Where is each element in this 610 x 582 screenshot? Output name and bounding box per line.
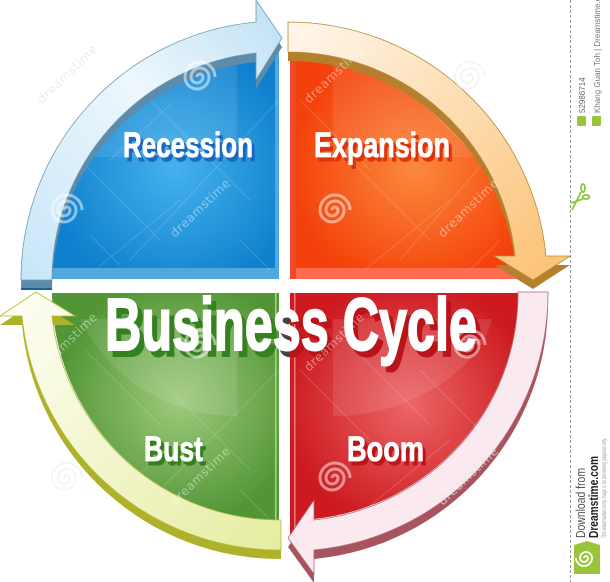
label: Expansion: Expansion (314, 126, 450, 165)
label: Boom: Boom (347, 430, 424, 469)
side credits: 52986714 (578, 77, 587, 113)
label: Expansion: Expansion (317, 130, 453, 169)
panel: bust (52, 293, 279, 520)
watermarks: dreamstime (435, 176, 501, 240)
watermarks: dreamstime (34, 310, 100, 374)
watermarks: dreamstime (167, 444, 233, 508)
label: Boom: Boom (350, 434, 427, 473)
watermarks: dreamstime (435, 444, 501, 508)
watermarks: dreamstime (34, 42, 100, 106)
panel: recession (52, 52, 279, 279)
icon: scissors (571, 184, 590, 210)
side credits (577, 0, 602, 126)
side download badge (573, 438, 608, 574)
label: Recession: Recession (126, 130, 256, 169)
label: Bust: Bust (147, 434, 206, 473)
panel: expansion (290, 61, 516, 279)
label: Bust: Bust (144, 430, 203, 469)
panel: boom (290, 293, 518, 534)
watermarks: dreamstime (167, 176, 233, 240)
watermarks: dreamstime (301, 310, 367, 374)
side download badge: This watermarked comp image is for previewing purposes only. (602, 438, 608, 538)
arrow: orange expansion arrow (288, 22, 570, 289)
watermarks (34, 42, 501, 508)
arrow: green bust arrow (0, 292, 281, 559)
arrow: blue recession arrow (21, 0, 282, 290)
side download badge: Dreamstime.com (586, 456, 601, 538)
arrow: pink boom arrow (288, 292, 548, 582)
side download badge: Download from (573, 468, 588, 538)
watermarks: dreamstime (301, 42, 367, 106)
side strip: dashed cut line (570, 0, 572, 582)
title: Business Cycle (108, 295, 481, 372)
label: Recession: Recession (123, 126, 253, 165)
